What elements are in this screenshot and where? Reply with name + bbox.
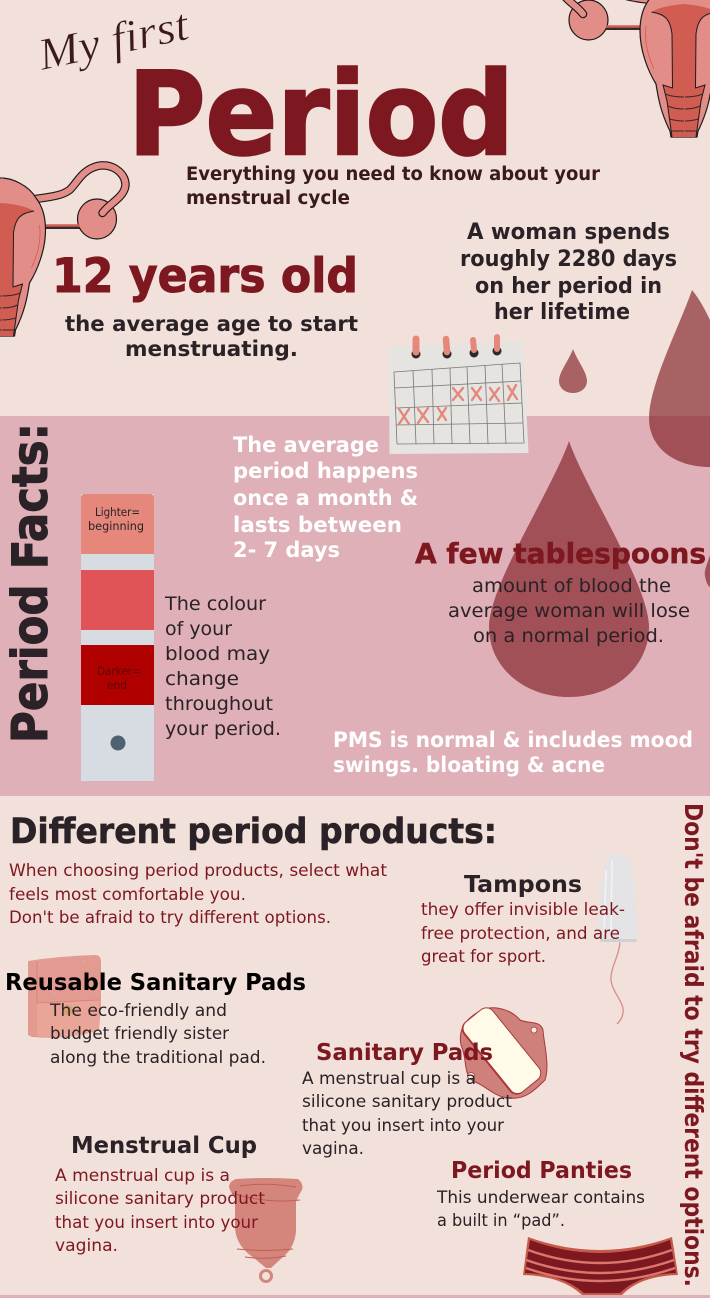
icon: uterus left [0, 165, 126, 336]
icon: reusable pad [28, 955, 101, 1038]
icon: uterus top right [560, 0, 710, 137]
text: choosing products: When choosing period products, select what [9, 861, 388, 880]
product: menstrual cup text: A menstrual cup is a [55, 1166, 230, 1185]
product: tampons heading: Tampons [464, 872, 582, 898]
stat caption: average age: the average age to start [65, 312, 358, 336]
text: colour of your blood: your period. [165, 718, 281, 740]
text: PMS: swings. bloating & acne [333, 753, 605, 777]
text: average period: once a month & [233, 486, 418, 510]
stat: a few tablespoons: A few tablespoons [415, 537, 706, 570]
icon: blood drop centre [489, 441, 649, 697]
product: tampons text: great for sport. [421, 947, 546, 966]
icon: small blood drop [559, 349, 587, 393]
product: sanitary pads text: A menstrual cup is a [302, 1069, 476, 1088]
text: colour of your blood: change [165, 668, 239, 690]
product: menstrual cup text: vagina. [55, 1236, 118, 1255]
text: colour of your blood: The colour [164, 593, 266, 615]
colour strip: end [107, 678, 127, 692]
product: reusable pads text: The eco-friendly and [49, 1001, 227, 1020]
stat: 2280 days: roughly 2280 days [460, 247, 677, 272]
text: average period: period happens [233, 459, 418, 483]
product: sanitary pads text: vagina. [302, 1139, 364, 1158]
colour strip [81, 494, 154, 781]
product: sanitary pads text: that you insert into your [302, 1116, 504, 1135]
colour strip: Darker= [97, 664, 141, 678]
product: reusable pads text: budget friendly sister [50, 1024, 229, 1043]
text: average period: 2- 7 days [233, 538, 340, 562]
icon: sanitary pad [458, 1004, 547, 1098]
title: my first: My first [33, 0, 194, 80]
text: PMS: PMS is normal & includes mood [333, 728, 693, 752]
title: period: Period [128, 48, 514, 182]
icon: tampon [598, 853, 637, 1024]
text: average period: The average [233, 433, 379, 457]
product: period panties heading: Period Panties [451, 1158, 632, 1184]
text: choosing products: feels most comfortable you. [9, 885, 246, 904]
product: tampons text: free protection, and are [421, 924, 620, 943]
product: menstrual cup text: silicone sanitary product [55, 1189, 266, 1208]
product: sanitary pads text: silicone sanitary product [302, 1092, 513, 1111]
text: colour of your blood: of your [165, 618, 232, 640]
heading: different period products: Different period products: [10, 812, 497, 852]
icon: blood drop edge [705, 555, 710, 587]
stat: 2280 days: her lifetime [494, 300, 630, 325]
product: menstrual cup heading: Menstrual Cup [71, 1133, 257, 1159]
text: colour of your blood: throughout [165, 693, 273, 715]
subtitle: Everything you need to know about your [186, 164, 601, 185]
product: tampons text: they offer invisible leak- [421, 900, 625, 919]
product: reusable pads heading: Reusable Sanitary Pads [5, 970, 306, 996]
icon: calendar [389, 337, 528, 454]
icon: large blood drop top right [649, 290, 710, 467]
stat: 2280 days: A woman spends [467, 220, 670, 245]
stat caption: blood amount: on a normal period. [473, 625, 664, 647]
colour strip: Lighter= [95, 505, 140, 519]
subtitle: menstrual cycle [186, 188, 350, 209]
text: colour of your blood: blood may [165, 643, 270, 665]
stat: 2280 days: on her period in [475, 274, 662, 299]
text: average period: lasts between [233, 513, 402, 537]
product: menstrual cup text: that you insert into your [55, 1213, 258, 1232]
product: reusable pads text: along the traditional pad. [50, 1048, 266, 1067]
product: period panties text: a built in “pad”. [437, 1211, 565, 1230]
panel: period facts band [0, 416, 710, 796]
stat: 12 years old: 12 years old [52, 249, 358, 304]
bottom edge strip [0, 1295, 710, 1298]
product: period panties text: This underwear contains [436, 1188, 645, 1207]
colour strip: beginning [88, 519, 144, 533]
icon: period panties [523, 1237, 678, 1295]
product: sanitary pads heading: Sanitary Pads [316, 1040, 493, 1066]
heading: period facts: Period Facts: [2, 423, 59, 743]
icon: menstrual cup [229, 1178, 302, 1282]
stat caption: average age: menstruating. [125, 337, 298, 361]
stat caption: blood amount: amount of blood the [472, 575, 671, 597]
text: choosing products: Don't be afraid to try different options. [9, 908, 331, 927]
stat caption: blood amount: average woman will lose [448, 600, 690, 622]
